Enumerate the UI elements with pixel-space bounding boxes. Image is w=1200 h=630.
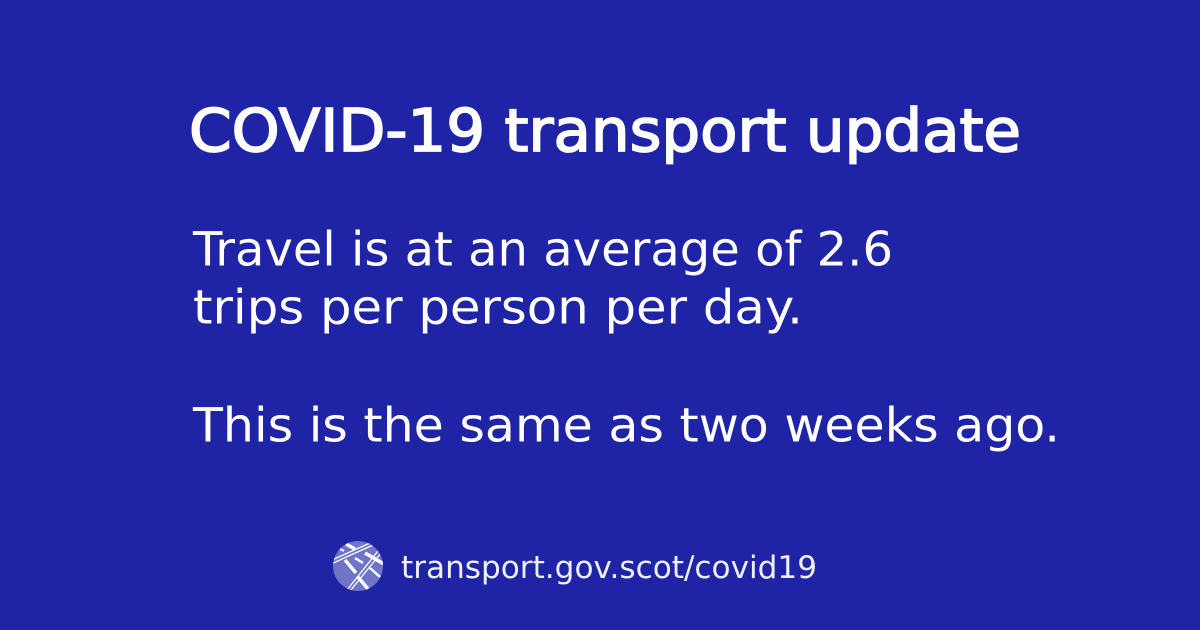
footer link: transport.gov.scot/covid19 xyxy=(401,550,817,586)
text block: travel average: trips per person per day. xyxy=(193,280,803,336)
text block: comparison: This is the same as two weeks ago. xyxy=(192,398,1060,454)
text block: travel average: Travel is at an average of 2.6 xyxy=(192,222,893,278)
title: COVID-19 transport update xyxy=(189,96,1021,165)
icon: transport logo xyxy=(332,541,384,591)
footer: logo and link xyxy=(332,541,817,591)
text block: travel average xyxy=(192,222,893,336)
infographic canvas xyxy=(192,105,1055,591)
